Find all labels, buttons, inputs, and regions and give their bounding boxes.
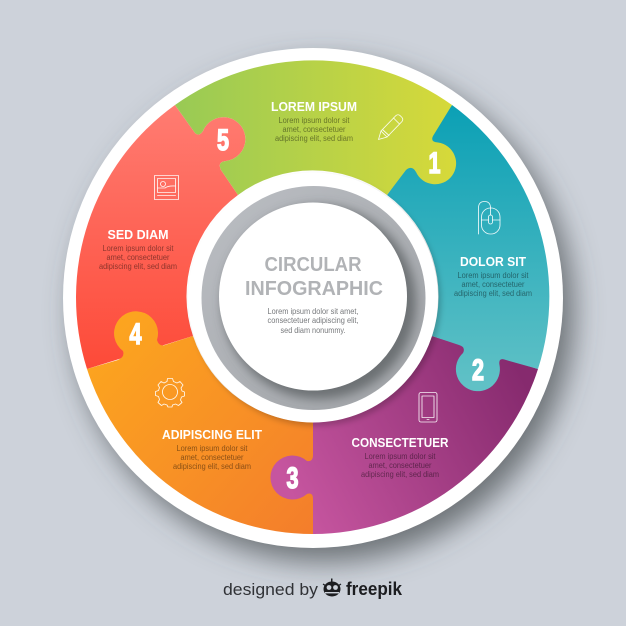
- outer white disc: [63, 48, 563, 548]
- text: lorem ipsum: LOREM IPSUM: [271, 100, 357, 114]
- panel: dolor sit (teal) with tab 2: [387, 105, 549, 391]
- text: dolor sit: amet, consectetuer: [462, 280, 525, 289]
- icon: smartphone: [419, 392, 437, 422]
- circular puzzle ring: [76, 60, 549, 534]
- hub white ring: [188, 172, 438, 422]
- panel: adipiscing elit (orange) with tab 4: [87, 311, 316, 534]
- icon: freepik bee: [323, 578, 341, 596]
- hub white disc: [219, 202, 407, 390]
- center hub: [188, 172, 441, 426]
- number 3: 3: [286, 460, 299, 495]
- text: sed diam: adipiscing elit, sed diam: [99, 262, 177, 271]
- center body text: [268, 307, 358, 335]
- center body text: consectetuer adipiscing elit,: [268, 316, 358, 325]
- icon: pencil: [378, 115, 403, 140]
- number 4: 4: [129, 316, 142, 351]
- text: dolor sit: DOLOR SIT: [460, 255, 526, 269]
- outer drop shadow: [74, 62, 574, 562]
- text: consectetuer: [352, 436, 448, 479]
- center title: INFOGRAPHIC: [245, 278, 383, 300]
- center body text: sed diam nonummy.: [280, 326, 346, 335]
- text: adipiscing elit: amet, consectetuer: [180, 453, 244, 462]
- text: dolor sit: Lorem ipsum dolor sit: [458, 271, 529, 280]
- panel: lorem ipsum (green) with tab 1: [175, 60, 456, 195]
- text: lorem ipsum: amet, consectetuer: [282, 125, 346, 134]
- text: sed diam: amet, consectetuer: [106, 253, 170, 262]
- text: adipiscing elit: ADIPISCING ELIT: [162, 428, 262, 442]
- text: sed diam: Lorem ipsum dolor sit: [102, 244, 174, 253]
- text: consectetuer: amet, consectetuer: [368, 461, 432, 470]
- hub inner shadow: [222, 205, 416, 399]
- number 1: 1: [428, 145, 441, 180]
- icon: mouse: [478, 202, 500, 234]
- text: adipiscing elit: Lorem ipsum dolor sit: [176, 444, 248, 453]
- credit text: designed by: [223, 580, 319, 599]
- icon: gear: [156, 378, 184, 407]
- panel: consectetuer (purple) with tab 3: [270, 336, 538, 534]
- text: adipiscing elit: [162, 428, 262, 471]
- text: adipiscing elit: adipiscing elit, sed diam: [173, 462, 251, 471]
- panel: sed diam (red) with tab 5: [76, 105, 245, 369]
- text: consectetuer: Lorem ipsum dolor sit: [364, 452, 436, 461]
- number 5: 5: [217, 122, 229, 157]
- center title: CIRCULAR: [264, 254, 362, 276]
- credit: designed by freepik: [223, 578, 403, 599]
- freepik wordmark: freepik: [346, 579, 403, 599]
- hub shadow: [191, 176, 441, 426]
- text: lorem ipsum: [271, 100, 357, 143]
- text: consectetuer: adipiscing elit, sed diam: [361, 470, 439, 479]
- text: lorem ipsum: adipiscing elit, sed diam: [275, 134, 353, 143]
- text: dolor sit: [454, 255, 532, 298]
- icon: picture: [154, 176, 178, 200]
- hub gray ring: [202, 186, 426, 410]
- number 2: 2: [472, 352, 484, 387]
- text: sed diam: [99, 228, 177, 271]
- center body text: Lorem ipsum dolor sit amet,: [268, 307, 358, 316]
- text: sed diam: SED DIAM: [108, 228, 168, 242]
- text: lorem ipsum: Lorem ipsum dolor sit: [278, 116, 350, 125]
- text: consectetuer: CONSECTETUER: [352, 436, 448, 450]
- text: dolor sit: adipiscing elit, sed diam: [454, 289, 532, 298]
- center title: [245, 254, 383, 300]
